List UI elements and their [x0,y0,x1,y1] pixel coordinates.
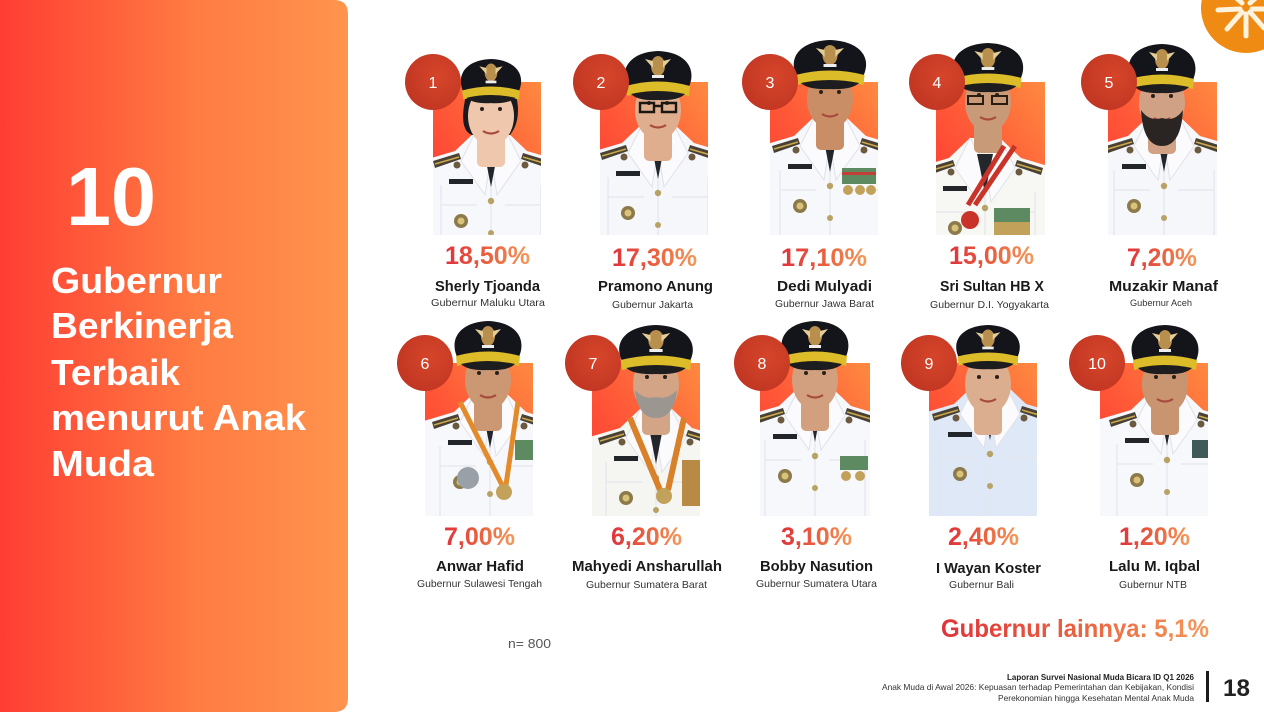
percentage 2: 17,30% [612,244,697,272]
role 7: Gubernur Sumatera Barat [586,579,707,591]
percentage 8: 3,10% [781,523,852,551]
card 7: Mahyedi Ansharullah [565,325,722,588]
name 2: Pramono Anung [598,279,713,295]
portrait 8 [760,321,870,516]
name 3: Dedi Mulyadi [777,279,872,295]
rank badge 9: 9 [925,356,934,373]
panel heading: Terbaik [51,352,181,393]
role 2: Gubernur Jakarta [612,299,693,311]
role 4: Gubernur D.I. Yogyakarta [930,299,1049,311]
rank badge 1: 1 [429,75,438,92]
portrait 5 [1108,44,1217,235]
name 7: Mahyedi Ansharullah [572,559,722,575]
rank badge 7 [565,335,621,391]
portrait 6 [425,321,533,516]
card 8: Bobby Nasution [734,321,877,587]
rank badge 3: 3 [766,75,775,92]
other governors callout: Gubernur lainnya: 5,1% [941,615,1209,643]
report source footer: Anak Muda di Awal 2026: Kepuasan terhadap Pemerintahan dan Kebijakan, Kondisi [882,682,1194,692]
rank badge 8: 8 [758,356,767,373]
panel heading [51,260,307,484]
role 5: Gubernur Aceh [1130,298,1192,308]
rank badge 3 [742,54,798,110]
left gradient panel [0,0,348,712]
name 9: I Wayan Koster [936,561,1041,577]
percentage 3: 17,10% [781,244,867,272]
rank badge 1 [405,54,461,110]
rank badge 2: 2 [597,75,606,92]
panel heading: Berkinerja [51,305,234,346]
portrait 3 [770,40,878,235]
card 3: Dedi Mulyadi [742,40,878,307]
rank badge 6: 6 [421,356,430,373]
big number 10: 10 [66,150,156,243]
role 1: Gubernur Maluku Utara [431,297,545,309]
panel heading: Muda [51,443,155,484]
report source footer: Laporan Survei Nasional Muda Bicara ID Q1 2026 [1007,672,1194,682]
percentage 6: 7,00% [444,523,515,551]
portrait 10 [1100,325,1208,516]
portrait 1 [433,59,541,235]
page number [1206,671,1250,702]
percentage 9: 2,40% [948,523,1019,551]
percentage 5: 7,20% [1127,244,1197,272]
name 4: Sri Sultan HB X [940,279,1044,295]
name 8: Bobby Nasution [760,559,873,575]
name 6: Anwar Hafid [436,559,524,575]
card 4: Sri Sultan HB X [909,43,1049,310]
role 10: Gubernur NTB [1119,579,1187,591]
card 9: I Wayan Koster [901,325,1041,588]
rank badge 8 [734,335,790,391]
rank badge 7: 7 [589,356,598,373]
rank badge 2 [573,54,629,110]
role 6: Gubernur Sulawesi Tengah [417,578,542,590]
page number: 18 [1223,675,1250,702]
percentage 1: 18,50% [445,242,530,270]
panel heading: Gubernur [51,260,222,301]
rank badge 4: 4 [933,75,942,92]
report source footer [882,672,1194,703]
rank badge 6 [397,335,453,391]
role 8: Gubernur Sumatera Utara [756,578,877,590]
role 3: Gubernur Jawa Barat [775,298,874,310]
card 10: Lalu M. Iqbal [1069,325,1208,588]
rank badge 4 [909,54,965,110]
card 1: Sherly Tjoanda [405,54,545,306]
percentage 10: 1,20% [1119,523,1190,551]
card 6: Anwar Hafid [397,321,542,589]
rank badge 10: 10 [1088,356,1106,373]
rank badge 9 [901,335,957,391]
role 9: Gubernur Bali [949,579,1014,591]
rank badge 5 [1081,54,1137,110]
percentage 4: 15,00% [949,242,1034,270]
report source footer: Perekonomian hingga Kesehatan Mental Anak Muda [998,693,1194,703]
percentage 7: 6,20% [611,523,682,551]
name 10: Lalu M. Iqbal [1109,559,1200,575]
portrait 7 [592,325,700,516]
rank badge 10 [1069,335,1125,391]
portrait 9 [929,325,1037,516]
sample size note: n= 800 [508,636,551,651]
logo: orange sunburst circle [1201,0,1264,53]
portrait 4 [936,43,1045,235]
name 1: Sherly Tjoanda [435,279,541,295]
name 5: Muzakir Manaf [1109,279,1218,295]
panel heading: menurut Anak [51,397,307,438]
portrait 2 [600,51,708,235]
card 5: Muzakir Manaf [1081,44,1218,306]
rank badge 5: 5 [1105,75,1114,92]
card 2: Pramono Anung [573,51,712,308]
